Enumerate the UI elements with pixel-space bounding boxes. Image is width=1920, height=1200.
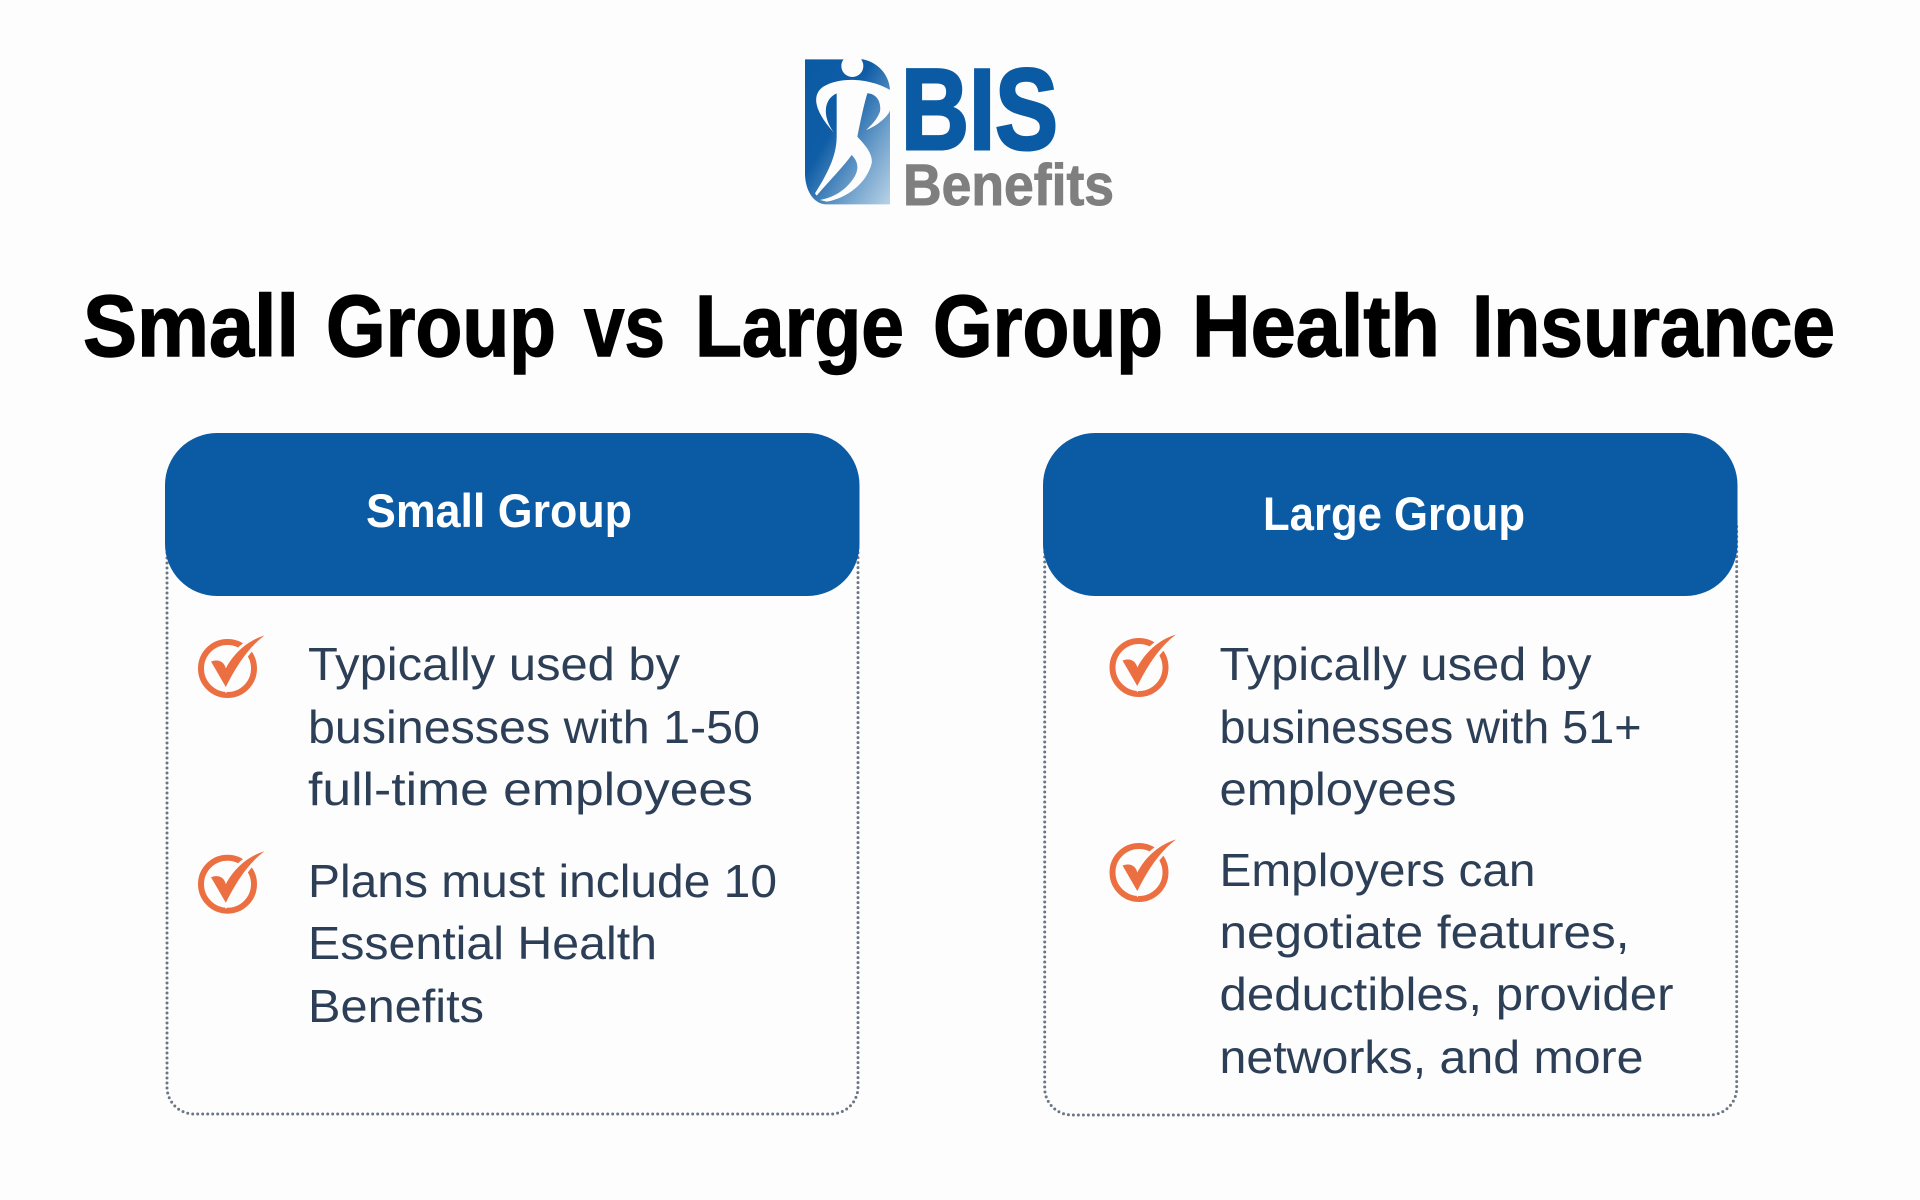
- text: employees: [1220, 763, 1456, 815]
- icon: check mark: [1112, 840, 1176, 899]
- panel: small group: [165, 433, 860, 1114]
- icon: check mark: [201, 636, 264, 695]
- panel border: [167, 500, 858, 1114]
- text: [1220, 844, 1674, 1083]
- icon: check mark: [201, 851, 264, 911]
- list item: essential health benefits: [201, 851, 777, 1032]
- text: businesses with 1-50: [308, 701, 760, 753]
- text: [308, 638, 760, 815]
- text: negotiate features,: [1220, 906, 1630, 958]
- text: Plans must include 10: [308, 855, 777, 907]
- title: Small: [83, 278, 299, 375]
- title: Group: [933, 278, 1163, 375]
- text: networks, and more: [1220, 1031, 1644, 1083]
- icon: runner shield: [805, 55, 890, 204]
- title: Group: [326, 278, 556, 375]
- text: [1220, 638, 1642, 815]
- header: small group: [165, 433, 860, 596]
- header: large group: Large Group: [1263, 487, 1525, 540]
- logo wordmark: BIS: BIS: [901, 46, 1058, 174]
- logo: BIS Benefits: [805, 46, 1114, 218]
- text: [308, 855, 777, 1032]
- text: Employers can: [1220, 844, 1536, 896]
- text: businesses with 51+: [1220, 701, 1642, 753]
- icon: check mark: [1112, 634, 1176, 694]
- title: Health: [1192, 278, 1440, 375]
- text: Essential Health: [308, 917, 657, 969]
- title: [83, 278, 1835, 375]
- header: small group: Small Group: [366, 484, 632, 537]
- text: Typically used by: [308, 638, 680, 690]
- text: deductibles, provider: [1220, 968, 1674, 1020]
- title: Insurance: [1472, 278, 1835, 375]
- list item: 51+ employees: [1112, 634, 1642, 815]
- list item: 1-50 employees: [201, 636, 760, 815]
- list item: negotiate features: [1112, 840, 1674, 1083]
- title: Large: [695, 278, 904, 375]
- header: large group: [1043, 433, 1738, 596]
- text: Typically used by: [1220, 638, 1592, 690]
- panel: large group: [1043, 433, 1738, 1115]
- panel border: [1045, 500, 1737, 1115]
- text: Benefits: [308, 980, 484, 1032]
- title: vs: [584, 278, 665, 375]
- text: full-time employees: [308, 763, 753, 815]
- logo wordmark: Benefits: Benefits: [903, 153, 1114, 218]
